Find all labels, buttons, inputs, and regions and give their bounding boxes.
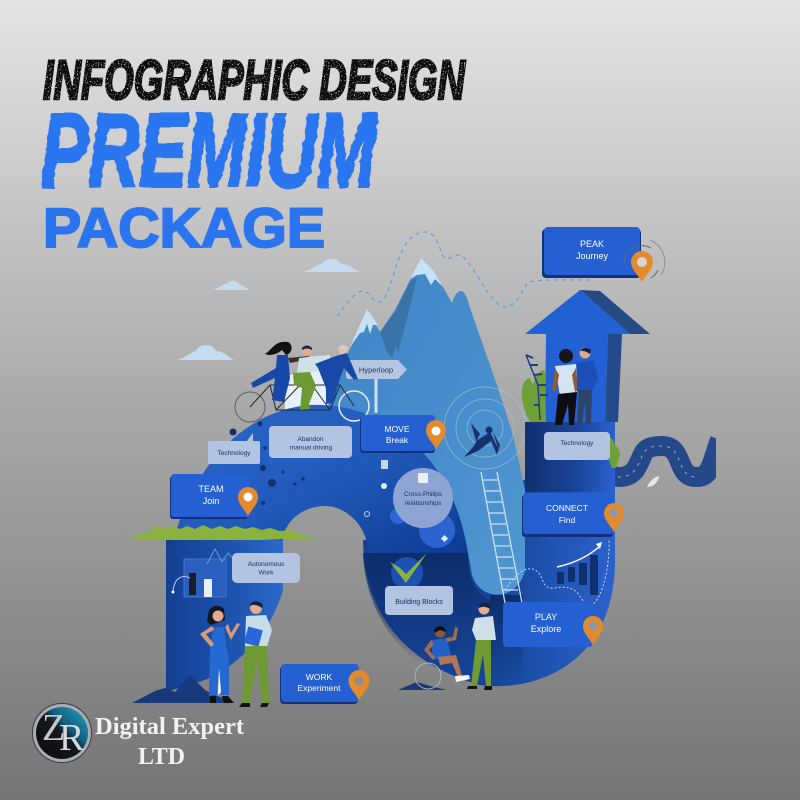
up arrow — [525, 290, 650, 422]
card: CONNECT Find: CONNECT — [546, 503, 588, 513]
icon: checkmark badge — [390, 553, 427, 589]
brand name: Digital Expert — [95, 714, 244, 740]
pin: TEAM — [238, 487, 258, 516]
sign: Hyperloop — [346, 360, 407, 413]
card: WORK Experiment — [280, 664, 359, 704]
callout: Autonomous Work: Work — [258, 570, 274, 576]
card: WORK Experiment: WORK — [306, 672, 333, 682]
people: woman and man talking — [200, 601, 272, 707]
card: TEAM Join — [170, 474, 250, 519]
rider: woman — [251, 342, 309, 402]
brand name: LTD — [138, 744, 185, 770]
pin: PLAY — [583, 616, 603, 645]
mountain — [285, 258, 526, 595]
callout: Technology left: Technology — [218, 450, 251, 457]
heading: Premium: PREMIUM — [41, 93, 378, 209]
callout: Cross-Philips relationships: Cross-Philips — [404, 491, 443, 498]
feather — [647, 476, 659, 487]
rider: middle — [293, 346, 330, 410]
card: TEAM Join: TEAM — [198, 484, 224, 494]
callout: Autonomous Work — [232, 553, 300, 583]
base block — [525, 422, 615, 492]
callout: Technology left — [208, 433, 260, 464]
clouds — [177, 259, 361, 360]
callout: Cross-Philips relationships: relationships — [405, 500, 442, 507]
card: MOVE Break: Break — [386, 435, 409, 445]
card: PEAK Journey — [542, 227, 641, 278]
connector dots — [230, 422, 305, 505]
card: PEAK Journey: Journey — [576, 251, 609, 261]
card: CONNECT Find: Find — [559, 515, 576, 525]
plant small — [607, 433, 620, 468]
callout: Building Blocks: Building Blocks — [395, 599, 443, 606]
callout: Technology right: Technology — [561, 440, 594, 447]
callout: Autonomous Work: Autonomous — [248, 561, 285, 568]
plant — [522, 355, 548, 422]
pin: WORK — [348, 670, 370, 700]
climber — [464, 423, 500, 457]
card: PLAY Explore — [503, 602, 593, 647]
dark band — [363, 553, 490, 668]
dark notch under channel — [490, 595, 523, 680]
callout: Building Blocks — [385, 586, 453, 615]
card: MOVE Break — [360, 415, 435, 453]
dashed trail — [337, 232, 590, 316]
pin: CONNECT — [604, 503, 624, 532]
callout: Abandon manual driving: manual driving — [290, 444, 333, 452]
heading: Package: PACKAGE — [43, 196, 325, 259]
lower U section — [363, 480, 615, 686]
callout: Cross-Philips relationships — [364, 460, 455, 548]
brand name — [95, 714, 244, 770]
callout: Abandon manual driving: Abandon — [297, 436, 324, 443]
card: WORK Experiment: Experiment — [298, 683, 341, 693]
card: TEAM Join: Join — [203, 496, 219, 506]
pin: PEAK — [624, 240, 665, 282]
title: Infographic Design: INFOGRAPHIC DESIGN — [43, 48, 466, 111]
card: CONNECT Find — [522, 493, 614, 537]
card: PEAK Journey: PEAK — [580, 239, 604, 249]
ladder — [481, 472, 522, 603]
sign: Hyperloop: Hyperloop — [359, 366, 393, 374]
bike frame — [235, 385, 369, 422]
left column — [166, 540, 283, 692]
couple on arrow — [552, 348, 598, 425]
pin: MOVE — [426, 420, 446, 449]
logo: ZR — [32, 704, 92, 762]
dotted route — [505, 540, 609, 606]
callout: Technology right — [544, 432, 610, 460]
card: PLAY Explore: PLAY — [535, 612, 557, 622]
logo: ZR: Z — [42, 707, 65, 749]
grass — [130, 525, 315, 539]
card: MOVE Break: MOVE — [384, 424, 410, 434]
people: wheelchair user and standing man — [415, 602, 496, 690]
logo: ZR: R — [59, 717, 85, 759]
rider: right — [315, 345, 358, 404]
hills — [132, 675, 447, 703]
callout: Abandon manual driving — [269, 426, 352, 458]
window illustration — [172, 549, 238, 597]
tandem bicycle with riders — [235, 342, 369, 422]
dome arch — [175, 405, 468, 553]
road — [600, 440, 720, 477]
bar chart with arrow — [557, 542, 602, 595]
card: PLAY Explore: Explore — [531, 624, 561, 634]
